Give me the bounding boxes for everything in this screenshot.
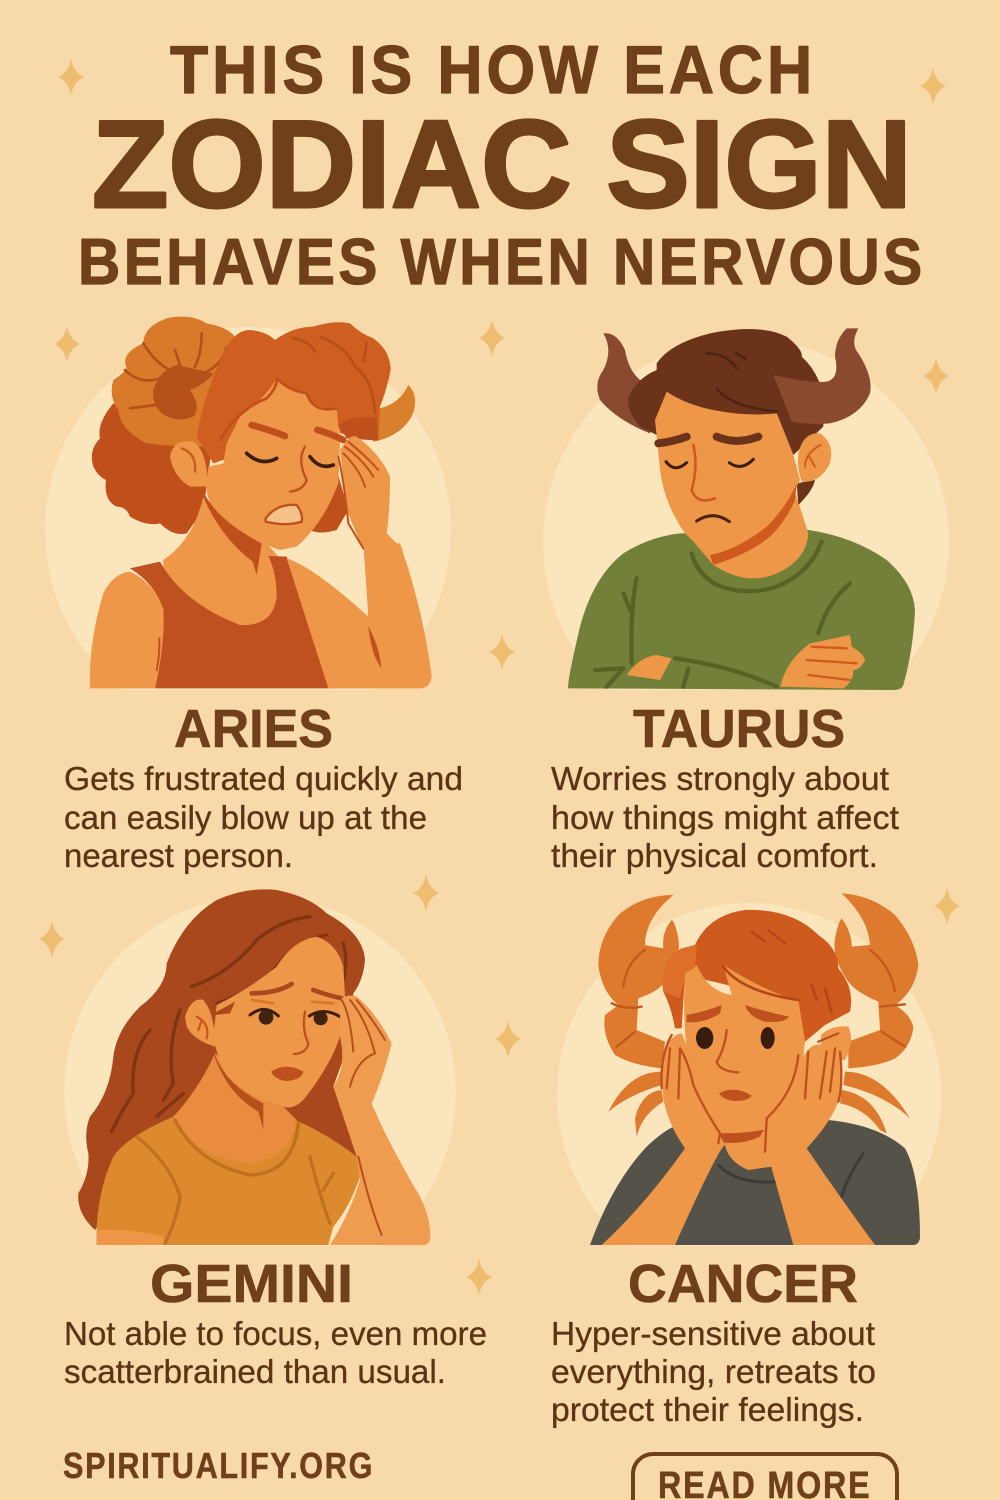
face bbox=[170, 378, 343, 575]
title: ZODIAC SIGN bbox=[92, 96, 912, 234]
ear bbox=[798, 433, 831, 482]
decorative sparkles bbox=[39, 59, 960, 1295]
description: aries: can easily blow up at the bbox=[64, 799, 427, 836]
body bbox=[163, 497, 280, 627]
description: taurus bbox=[551, 760, 899, 874]
hands and arms bbox=[602, 1033, 875, 1245]
description: cancer: everything, retreats to bbox=[551, 1353, 876, 1390]
illustration: cancer boy with crab claws bbox=[557, 893, 941, 1246]
description: gemini: Not able to focus, even more bbox=[64, 1315, 487, 1352]
hands bbox=[627, 655, 672, 680]
illustration: aries woman with ram horns bbox=[45, 316, 451, 690]
face bbox=[185, 937, 345, 1130]
description: cancer: Hyper-sensitive about bbox=[551, 1315, 875, 1352]
description: gemini: scatterbrained than usual. bbox=[64, 1353, 446, 1390]
illustration: taurus man with bull horns bbox=[543, 328, 949, 690]
hair bbox=[628, 329, 823, 455]
heading: taurus: TAURUS bbox=[633, 699, 845, 759]
description: cancer bbox=[551, 1315, 876, 1428]
neck bbox=[722, 1132, 772, 1170]
sweater bbox=[568, 530, 915, 690]
title: THIS IS HOW EACH bbox=[170, 32, 812, 108]
footer: website: SPIRITUALIFY.ORG bbox=[63, 1447, 372, 1487]
heading: cancer: CANCER bbox=[628, 1254, 858, 1314]
crab claws and legs bbox=[598, 893, 918, 1137]
face lines bbox=[658, 437, 758, 443]
panel: cancer bbox=[551, 893, 941, 1428]
shirt bbox=[97, 1117, 360, 1245]
heading: aries: ARIES bbox=[174, 699, 333, 759]
shirt bbox=[590, 1120, 920, 1245]
description: aries bbox=[64, 760, 463, 874]
description: taurus: Worries strongly about bbox=[551, 760, 889, 797]
hand on temple bbox=[338, 436, 403, 550]
description: gemini bbox=[64, 1315, 487, 1390]
heading: gemini: GEMINI bbox=[150, 1254, 353, 1314]
description: aries: Gets frustrated quickly and bbox=[64, 760, 463, 797]
panel: gemini bbox=[64, 889, 487, 1390]
title bbox=[78, 32, 922, 299]
description: taurus: their physical comfort. bbox=[551, 837, 878, 874]
panel: taurus bbox=[543, 328, 949, 874]
head bbox=[662, 910, 851, 1143]
title: BEHAVES WHEN NERVOUS bbox=[78, 226, 922, 299]
hand and arm bbox=[330, 996, 430, 1245]
button: read more bbox=[633, 1454, 897, 1500]
description: aries: nearest person. bbox=[64, 837, 293, 874]
panel: aries bbox=[45, 317, 463, 874]
illustration: gemini woman with long hair bbox=[64, 889, 456, 1246]
description: cancer: protect their feelings. bbox=[551, 1391, 864, 1428]
description: taurus: how things might affect bbox=[551, 799, 899, 836]
neck bbox=[170, 1053, 303, 1180]
